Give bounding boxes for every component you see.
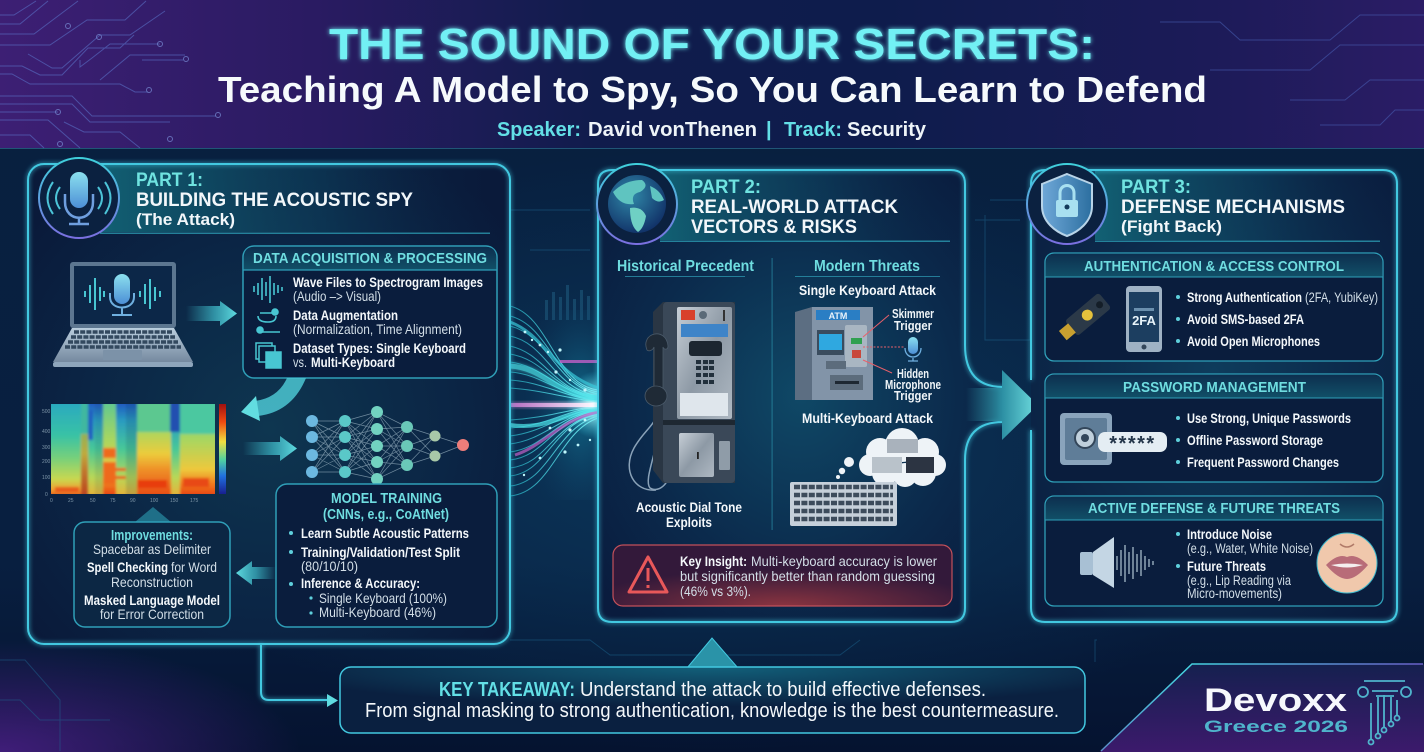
chart: spectrogram: 500 (42, 409, 51, 415)
box: data acquisition and processing: DATA ACQUISITION & PROCESSING (253, 251, 487, 267)
arrow: model training to improvements (236, 561, 276, 585)
caption: acoustic dial tone exploits (636, 499, 742, 530)
icon: security key (1056, 293, 1111, 343)
connector: Part 1 to key takeaway (261, 644, 338, 707)
icon: phone with 2FA (1126, 286, 1162, 352)
Part 3 heading: DEFENSE MECHANISMS (1121, 197, 1345, 218)
panel: Part 3 defense mechanisms (261, 164, 1424, 752)
icon: lips (1317, 533, 1377, 593)
box: active defense and future threats: Micro-movements) (1187, 585, 1282, 601)
icon: shield with padlock (1027, 164, 1107, 244)
box: active defense and future threats: ACTIVE DEFENSE & FUTURE THREATS (1088, 501, 1340, 517)
Part 3 heading: (Fight Back) (1121, 217, 1222, 236)
subheading: single keyboard attack: Single Keyboard Attack (799, 282, 936, 298)
box: password management: Frequent Password Changes (1187, 454, 1339, 470)
subheading: historical precedent: Historical Precedent (617, 258, 755, 275)
icon: speaker with noise (1080, 537, 1153, 588)
box: model training: Single Keyboard (100%) (319, 590, 447, 606)
speaker and track line: David vonThenen (588, 119, 757, 141)
chart: spectrogram: 0 (45, 492, 48, 498)
icon: thought cloud with keyboards (836, 428, 946, 487)
subheading: multi-keyboard attack: Multi-Keyboard Attack (802, 410, 933, 426)
box: model training: (80/10/10) (301, 558, 358, 574)
box: model training: MODEL TRAINING (331, 491, 442, 507)
chart: spectrogram: 90 (130, 498, 136, 504)
box: password management: Offline Password Storage (1187, 432, 1323, 448)
box: active defense and future threats: Future Threats (1187, 558, 1266, 574)
callout: key insight: but significantly better than random guessing (680, 568, 935, 584)
Part 3 heading: PART 3: (1121, 177, 1191, 198)
panel: Part 1 building the acoustic spy (28, 158, 510, 644)
icon: microphone (39, 158, 119, 238)
box: model training: Training/Validation/Test Split (301, 544, 460, 560)
box: active defense and future threats: (e.g., Water, White Noise) (1187, 540, 1313, 556)
arrow: spectrogram to neural network (243, 436, 297, 461)
chart: spectrogram: 0 (50, 498, 53, 504)
box: improvements (74, 507, 230, 627)
box: improvements: Improvements: (111, 528, 193, 544)
caption: acoustic dial tone exploits: Exploits (666, 514, 712, 530)
box: password management: PASSWORD MANAGEMENT (1123, 380, 1306, 396)
Part 1 heading: (The Attack) (136, 210, 235, 229)
icon: globe (597, 164, 677, 244)
chart: spectrogram: 100 (150, 498, 159, 504)
Part 3 heading (1121, 177, 1345, 236)
chart: spectrogram (42, 402, 226, 504)
subheading: modern threats: Modern Threats (814, 258, 920, 275)
item: data augmentation: (Normalization, Time Alignment) (293, 321, 462, 337)
item: dataset types: Dataset Types: Single Keyboard (293, 340, 466, 356)
item: dataset types: vs. (293, 354, 307, 370)
title: Teaching A Model to Spy, So You Can Learn to Defend (218, 69, 1207, 110)
box: password management (1045, 374, 1383, 482)
item: wave files: Wave Files to Spectrogram Images (293, 274, 483, 290)
icon: ATM with annotations: Hidden (897, 367, 929, 381)
icon: ATM with annotations: ATM (829, 311, 847, 321)
box: improvements: Spacebar as Delimiter (93, 541, 211, 557)
speaker and track line: Track: (784, 119, 842, 141)
callout: key insight: Multi-keyboard accuracy is lower (751, 553, 937, 569)
icon: ATM with annotations: Skimmer (892, 307, 934, 321)
chart: spectrogram: 75 (110, 498, 116, 504)
arrow: curved from data box to spectrogram (241, 378, 306, 421)
callout: key takeaway: Understand the attack to build effective defenses. (580, 679, 986, 701)
box: password management: Use Strong, Unique Passwords (1187, 410, 1351, 426)
speaker and track line: Security (847, 119, 927, 141)
box: authentication and access control: Avoid Open Microphones (1187, 333, 1320, 349)
chart: spectrogram: 175 (190, 498, 199, 504)
Part 1 heading: PART 1: (136, 170, 203, 191)
item: data augmentation (293, 307, 462, 337)
icon: keyboard (790, 482, 897, 526)
icon: waveform (254, 276, 282, 303)
chart: spectrogram: 50 (90, 498, 96, 504)
chart: spectrogram: 150 (170, 498, 179, 504)
speaker and track line (497, 119, 927, 141)
chart: spectrogram: 300 (42, 445, 51, 451)
icon: ATM with annotations: Trigger (894, 319, 932, 333)
icon: ATM with annotations: Microphone (885, 378, 941, 392)
chart: spectrogram: 200 (42, 459, 51, 465)
box: model training: (CNNs, e.g., CoAtNet) (323, 507, 449, 523)
icon: safe with password: ***** (1109, 433, 1156, 455)
box: active defense and future threats (1045, 496, 1383, 606)
panel: Part 2 real-world attack vectors and risks (597, 164, 1003, 622)
box: authentication and access control: AUTHENTICATION & ACCESS CONTROL (1084, 259, 1344, 275)
callout: key takeaway: From signal masking to strong authentication, knowledge is the best countermeasure. (365, 700, 1059, 722)
arrow: Part 2 to Part 3 (966, 370, 1038, 440)
light rays connecting Part 1 to Part 2 (510, 306, 626, 500)
box: improvements: for Word (171, 559, 217, 575)
logo: Devoxx Greece 2026: Devoxx (1204, 682, 1347, 718)
item: data augmentation: Data Augmentation (293, 307, 398, 323)
logo: Devoxx Greece 2026: Greece 2026 (1204, 717, 1348, 736)
box: authentication and access control: Strong Authentication (1187, 289, 1302, 305)
title (218, 20, 1207, 110)
box: active defense and future threats: Introduce Noise (1187, 526, 1272, 542)
box: data acquisition and processing (243, 246, 497, 378)
callout: key takeaway (340, 638, 1085, 733)
box: model training: Learn Subtle Acoustic Patterns (301, 525, 469, 541)
box: improvements: Reconstruction (111, 574, 193, 590)
icon: ATM with annotations (795, 307, 941, 403)
icon: column with circuit traces (1358, 681, 1411, 744)
icon: laptop (53, 262, 193, 367)
arrow: laptop to data box (186, 301, 237, 326)
chart: spectrogram: 25 (68, 498, 74, 504)
box: authentication and access control (1045, 253, 1383, 361)
callout: key takeaway: KEY TAKEAWAY: (439, 679, 575, 701)
icon: dataset stack (256, 343, 281, 368)
box: improvements: for Error Correction (100, 606, 204, 622)
icon: safe with password (1060, 413, 1167, 465)
item: wave files (293, 274, 483, 304)
box: active defense and future threats: (e.g., Lip Reading via (1187, 572, 1291, 588)
box: authentication and access control: Avoid SMS-based 2FA (1187, 311, 1304, 327)
caption: acoustic dial tone exploits: Acoustic Dial Tone (636, 499, 742, 515)
speaker and track line: Speaker: (497, 119, 581, 141)
item: wave files: (Audio –> Visual) (293, 288, 381, 304)
Part 2 heading (691, 177, 898, 238)
Part 2 heading: REAL-WORLD ATTACK (691, 197, 898, 218)
speaker and track line: | (766, 119, 772, 141)
callout: key insight (613, 545, 952, 606)
item: dataset types: Multi-Keyboard (311, 354, 395, 370)
Part 1 heading: BUILDING THE ACOUSTIC SPY (136, 190, 413, 211)
box: model training: Inference & Accuracy: (301, 575, 420, 591)
box: improvements: Spell Checking (87, 559, 168, 575)
icon: warning triangle (629, 557, 667, 592)
icon: ATM with annotations: Trigger (894, 389, 932, 403)
callout: key insight: (46% vs 3%). (680, 583, 751, 599)
icon: payphone (629, 302, 735, 490)
Part 1 heading (136, 170, 413, 229)
chart: spectrogram: 100 (42, 475, 51, 481)
callout: key insight: Key Insight: (680, 553, 747, 569)
Part 2 heading: PART 2: (691, 177, 761, 198)
diagram: neural network (306, 406, 469, 485)
icon: data augmentation (257, 309, 280, 333)
box: improvements: Masked Language Model (84, 592, 220, 608)
item: dataset types (293, 340, 466, 370)
box: authentication and access control: (2FA, YubiKey) (1305, 289, 1378, 305)
Part 2 heading: VECTORS & RISKS (691, 217, 857, 238)
box: model training (276, 484, 497, 627)
box: model training: Multi-Keyboard (46%) (319, 604, 436, 620)
chart: spectrogram: 400 (42, 429, 51, 435)
title: THE SOUND OF YOUR SECRETS: (329, 20, 1095, 69)
logo: Devoxx Greece 2026 (1100, 664, 1424, 752)
icon: phone with 2FA: 2FA (1132, 313, 1157, 328)
